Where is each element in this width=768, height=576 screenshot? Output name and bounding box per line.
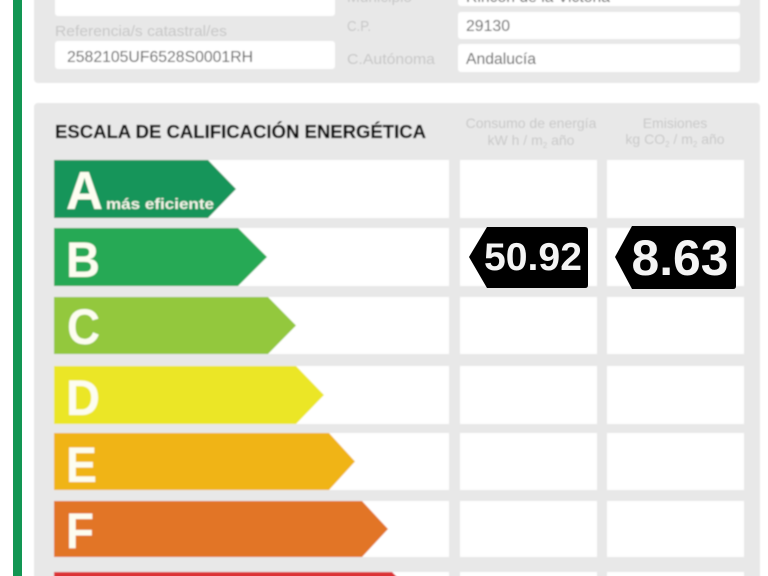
tag: energy use value: 50.92 [484,236,582,279]
field: cadastral reference: 2582105UF6528S0001RH [67,49,253,66]
row D: D [66,370,100,426]
blank field: address [55,0,335,16]
field: postal code: 29130 [466,18,510,35]
row B: B [66,232,100,288]
row F [54,501,744,559]
label: autonomous community: C.Autónoma [347,51,436,68]
row G [54,572,744,576]
row C [54,297,744,355]
label: cadastral references: Referencia/s catastral/es [55,23,227,40]
column heading: energy use: año [547,132,575,148]
column heading: emissions: / m [670,131,693,147]
column heading: energy use: Consumo de energía [466,115,597,131]
row F: F [66,503,94,559]
row D [54,366,744,426]
row A: más eficiente [106,196,214,213]
panel: energy rating scale [34,103,760,576]
column heading: emissions: año [697,131,725,147]
field: autonomous community: Andalucía [466,51,536,68]
row B [54,228,744,288]
row A [54,160,744,221]
label: postal code: C.P. [347,18,371,35]
column heading: energy use: kW h / m [488,132,575,150]
column heading: energy use: 2 [543,141,548,150]
column heading: emissions: Emisiones [643,115,707,131]
column heading: emissions: kg CO [625,131,725,149]
field: municipality [458,0,740,6]
column heading: emissions: 2 [693,140,698,149]
green side rule [13,0,22,576]
row A: A [66,161,103,221]
field: autonomous community [458,44,740,72]
tag: energy use value [469,227,588,288]
tag: emissions value: 8.63 [632,230,728,286]
column heading: emissions: 2 [665,140,670,149]
field: cadastral reference [55,41,335,69]
field: postal code [458,12,740,39]
row E: E [66,437,97,493]
row E [54,433,744,493]
row C: C [67,299,100,355]
heading: ESCALA DE CALIFICACIÓN ENERGÉTICA [55,121,426,142]
panel: building data [34,0,760,83]
